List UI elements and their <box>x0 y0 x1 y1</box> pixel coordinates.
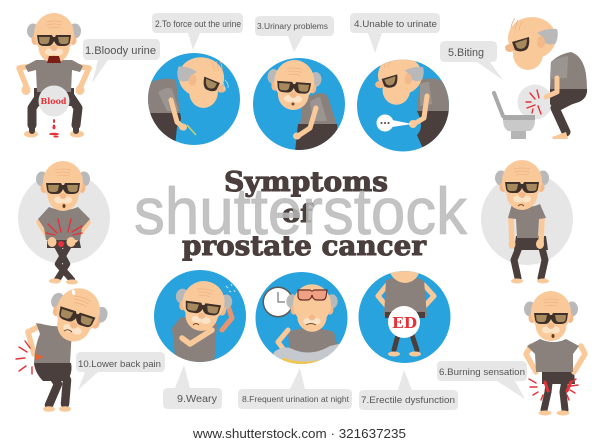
panel: left middle figure <box>18 161 110 284</box>
panel: 4 unable to urinate <box>350 13 452 152</box>
speech bubble 10: 10.Lower back pain <box>78 359 161 370</box>
figure: man with burning legs <box>524 291 585 416</box>
speech bubble 8: 8.Frequent urination at night <box>242 395 350 404</box>
speech bubble 1 <box>83 39 160 83</box>
ED circle: ED <box>392 314 417 332</box>
speech bubble 4: 4.Unable to urinate <box>354 19 437 30</box>
figure: man with blood <box>19 13 89 138</box>
blue circle scene 4 <box>357 56 452 152</box>
speech bubble 9: 9.Weary <box>177 393 218 405</box>
title: prostate cancer <box>182 231 427 262</box>
speech bubble 2: 2.To force out the urine <box>155 19 241 29</box>
pain burst <box>526 90 541 114</box>
panel: 2 to force out the urine <box>145 13 243 147</box>
panel: 1 bloody urine <box>19 13 160 138</box>
clock <box>262 286 294 318</box>
speech bubble 1: 1.Bloody urine <box>85 45 156 57</box>
speech bubble 3: 3.Urinary problems <box>257 22 328 31</box>
speech bubble 6 <box>437 361 527 399</box>
panel: 10 lower back pain <box>16 280 165 412</box>
blue circle scene 3 <box>253 58 345 152</box>
title: of <box>282 199 314 228</box>
watermark: shutterstock <box>134 174 468 248</box>
speech bubble 6: 6.Burning sensation <box>439 367 525 378</box>
pain highlight circle <box>518 84 552 120</box>
panel: 7 erectile dysfunction <box>358 270 458 410</box>
figure: man bent over <box>505 17 587 139</box>
pain burst <box>16 341 32 374</box>
figure: man with bent knees <box>495 160 549 284</box>
gray circle <box>18 172 110 264</box>
figure: man holding back <box>16 280 113 412</box>
blue circle scene 2 <box>145 53 240 147</box>
speech bubble 5: 5.Biting <box>448 47 484 59</box>
blood drops <box>49 119 59 138</box>
panel: 8 frequent urination at night <box>238 272 352 409</box>
blue circle scene 9 <box>154 270 246 366</box>
title: Symptoms <box>224 167 388 198</box>
footer credit: www.shutterstock.com · 321637235 <box>192 427 406 441</box>
panel: 3 urinary problems <box>253 16 345 152</box>
gray circle <box>481 173 573 265</box>
toilet <box>494 93 535 139</box>
red glasses <box>298 290 327 300</box>
panel: 5 biting <box>440 17 587 139</box>
speech bubble 7: 7.Erectile dysfunction <box>361 395 455 406</box>
figure: man clutching groin <box>36 161 90 284</box>
blue circle scene 8 <box>256 272 348 364</box>
blood circle: Blood <box>40 97 67 107</box>
panel: 9 weary <box>154 270 246 409</box>
title <box>182 167 427 262</box>
speech bubble 5 <box>440 41 503 80</box>
panel: 6 burning sensation <box>437 291 585 416</box>
thought bubble: no urine <box>376 114 412 132</box>
panel: right middle figure <box>481 160 573 284</box>
speech bubble 10 <box>76 352 165 390</box>
pain bursts <box>529 379 578 400</box>
